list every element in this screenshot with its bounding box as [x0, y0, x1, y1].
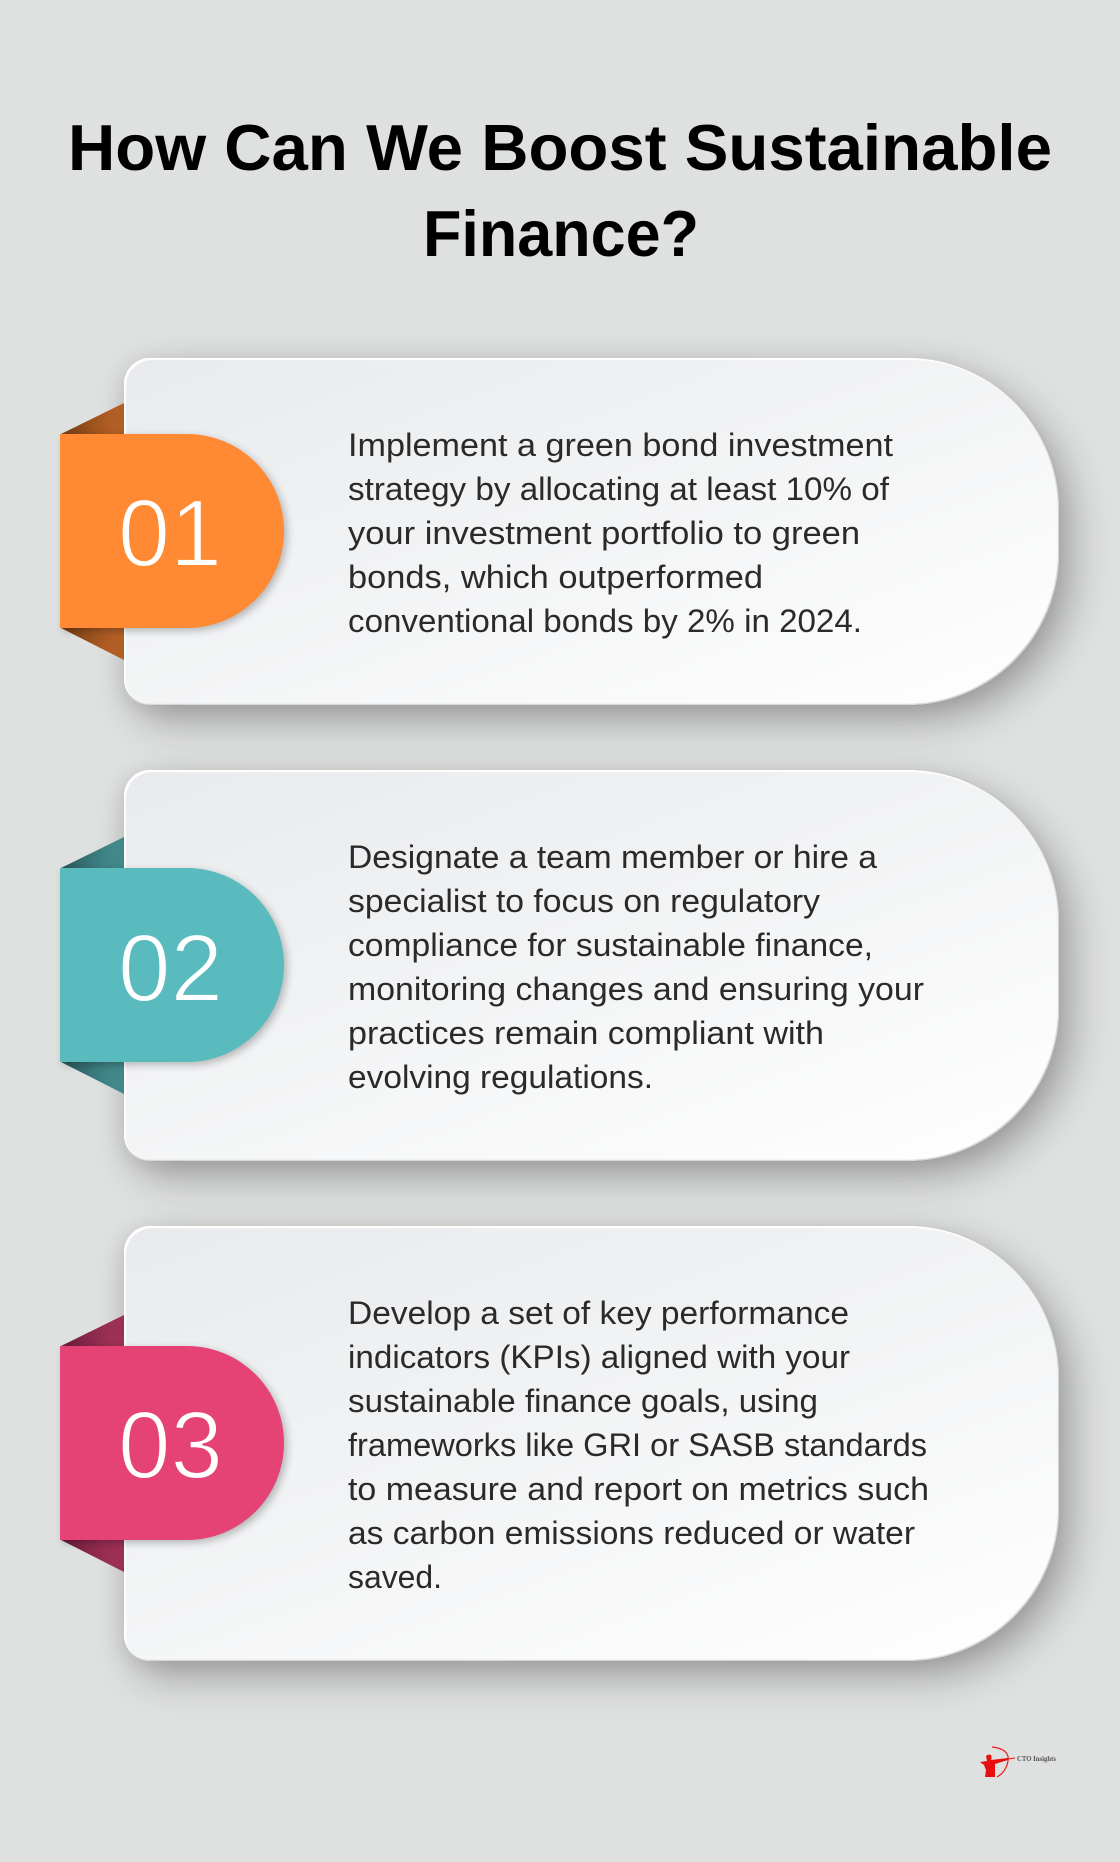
text: step 01 description: [348, 427, 893, 639]
logo: CTO Insights archer: [980, 1746, 1056, 1778]
text: step 03 description: frameworks like GRI or SASB standards: [348, 1427, 927, 1463]
card: step 03: [124, 1226, 1059, 1661]
title: How Can We Boost Sustainable: [68, 111, 1052, 184]
text: step 03 description: indicators (KPIs) aligned with your: [348, 1339, 850, 1375]
text: step 01 description: Implement a green bond investment: [348, 427, 893, 463]
text: step 03 description: sustainable finance goals, using: [348, 1383, 818, 1419]
number 01: 01: [118, 480, 222, 587]
text: step 02 description: Designate a team member or hire a: [348, 839, 877, 875]
text: step 02 description: practices remain compliant with: [348, 1015, 824, 1051]
text: step 01 description: conventional bonds by 2% in 2024.: [348, 603, 862, 639]
text: step 02 description: evolving regulations.: [348, 1059, 653, 1095]
text: step 03 description: [348, 1295, 929, 1595]
panel: step 01 green bonds: [59, 350, 1093, 742]
ribbon folds: pink: [61, 1315, 124, 1572]
text: step 03 description: Develop a set of key performance: [348, 1295, 849, 1331]
text: step 02 description: monitoring changes and ensuring your: [348, 971, 924, 1007]
text: step 03 description: saved.: [348, 1559, 442, 1595]
number 02: 02: [118, 915, 223, 1022]
panel: step 02 regulatory compliance: [59, 762, 1093, 1198]
ribbon folds: teal: [61, 837, 124, 1094]
text: step 01 description: strategy by allocating at least 10% of: [348, 471, 889, 507]
number badge 01: [60, 434, 284, 628]
number 03: 03: [118, 1392, 223, 1499]
text: step 01 description: your investment portfolio to green: [348, 515, 860, 551]
logo text: CTO Insights: [1017, 1754, 1056, 1763]
icon: archer figure: [980, 1747, 1015, 1777]
text: step 01 description: bonds, which outperformed: [348, 559, 763, 595]
number badge 03: [60, 1346, 284, 1540]
number badge 02: [60, 868, 284, 1062]
title: [68, 111, 1052, 270]
ribbon folds: orange: [61, 403, 124, 660]
card: step 02: [124, 770, 1059, 1161]
title: Finance?: [423, 197, 699, 270]
text: step 03 description: as carbon emissions reduced or water: [348, 1515, 915, 1551]
panel: step 03 KPIs: [59, 1218, 1093, 1698]
text: step 02 description: [348, 839, 924, 1095]
text: step 02 description: compliance for sustainable finance,: [348, 927, 873, 963]
text: step 03 description: to measure and report on metrics such: [348, 1471, 929, 1507]
card: step 01: [124, 358, 1059, 705]
text: step 02 description: specialist to focus on regulatory: [348, 883, 820, 919]
